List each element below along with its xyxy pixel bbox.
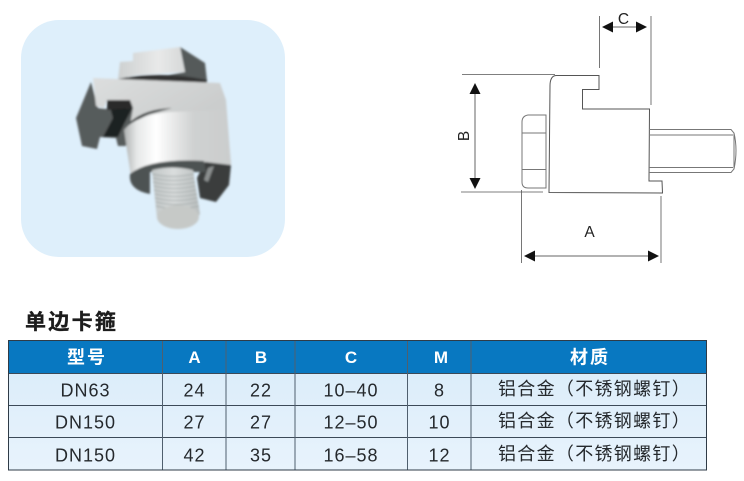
- extension lines: [461, 16, 661, 263]
- icon: clamp product: [76, 47, 231, 229]
- table header: 型号: [67, 348, 107, 368]
- row 2: 12–50: [323, 412, 379, 432]
- row 2: 27: [250, 412, 272, 432]
- row 1: [60, 379, 691, 400]
- technical drawing: [456, 11, 736, 263]
- row 3: 铝合金（不锈钢螺钉）: [498, 444, 691, 464]
- row 2: 10: [428, 412, 451, 432]
- row 2: DN150: [55, 412, 116, 432]
- table header: C: [345, 348, 357, 367]
- dimension A: A: [584, 224, 595, 241]
- row 3: 35: [250, 446, 272, 466]
- table header: B: [255, 348, 267, 367]
- table header: [8, 340, 706, 374]
- dimension B: B: [456, 131, 473, 141]
- panel: product photo: [21, 20, 285, 257]
- row 3: DN150: [55, 446, 116, 466]
- table header: 材质: [570, 346, 610, 368]
- heading: 单边卡箍: [25, 311, 118, 334]
- dimension A: [524, 224, 659, 262]
- dimension C: C: [618, 11, 629, 28]
- table header: M: [434, 348, 448, 367]
- row 1: 8: [434, 380, 445, 400]
- row 3: 12: [428, 446, 451, 466]
- row 1: 24: [183, 380, 206, 400]
- row 1: 铝合金（不锈钢螺钉）: [498, 379, 691, 399]
- nut: [522, 115, 546, 188]
- spec table: [8, 340, 706, 470]
- bolt shaft: [649, 130, 736, 172]
- row 1: 10–40: [323, 380, 379, 400]
- row 1: 22: [250, 380, 272, 400]
- table rows: [8, 374, 706, 470]
- dimension B: [456, 83, 480, 189]
- row 3: 42: [183, 446, 206, 466]
- row 1: DN63: [60, 380, 111, 400]
- clamp profile: [549, 76, 662, 193]
- row 3: [55, 444, 691, 466]
- row 2: 铝合金（不锈钢螺钉）: [498, 411, 691, 431]
- row 2: [55, 411, 691, 432]
- table header: A: [188, 348, 201, 367]
- row 3: 16–58: [323, 446, 379, 466]
- row 2: 27: [183, 412, 206, 432]
- dimension C: [602, 11, 647, 32]
